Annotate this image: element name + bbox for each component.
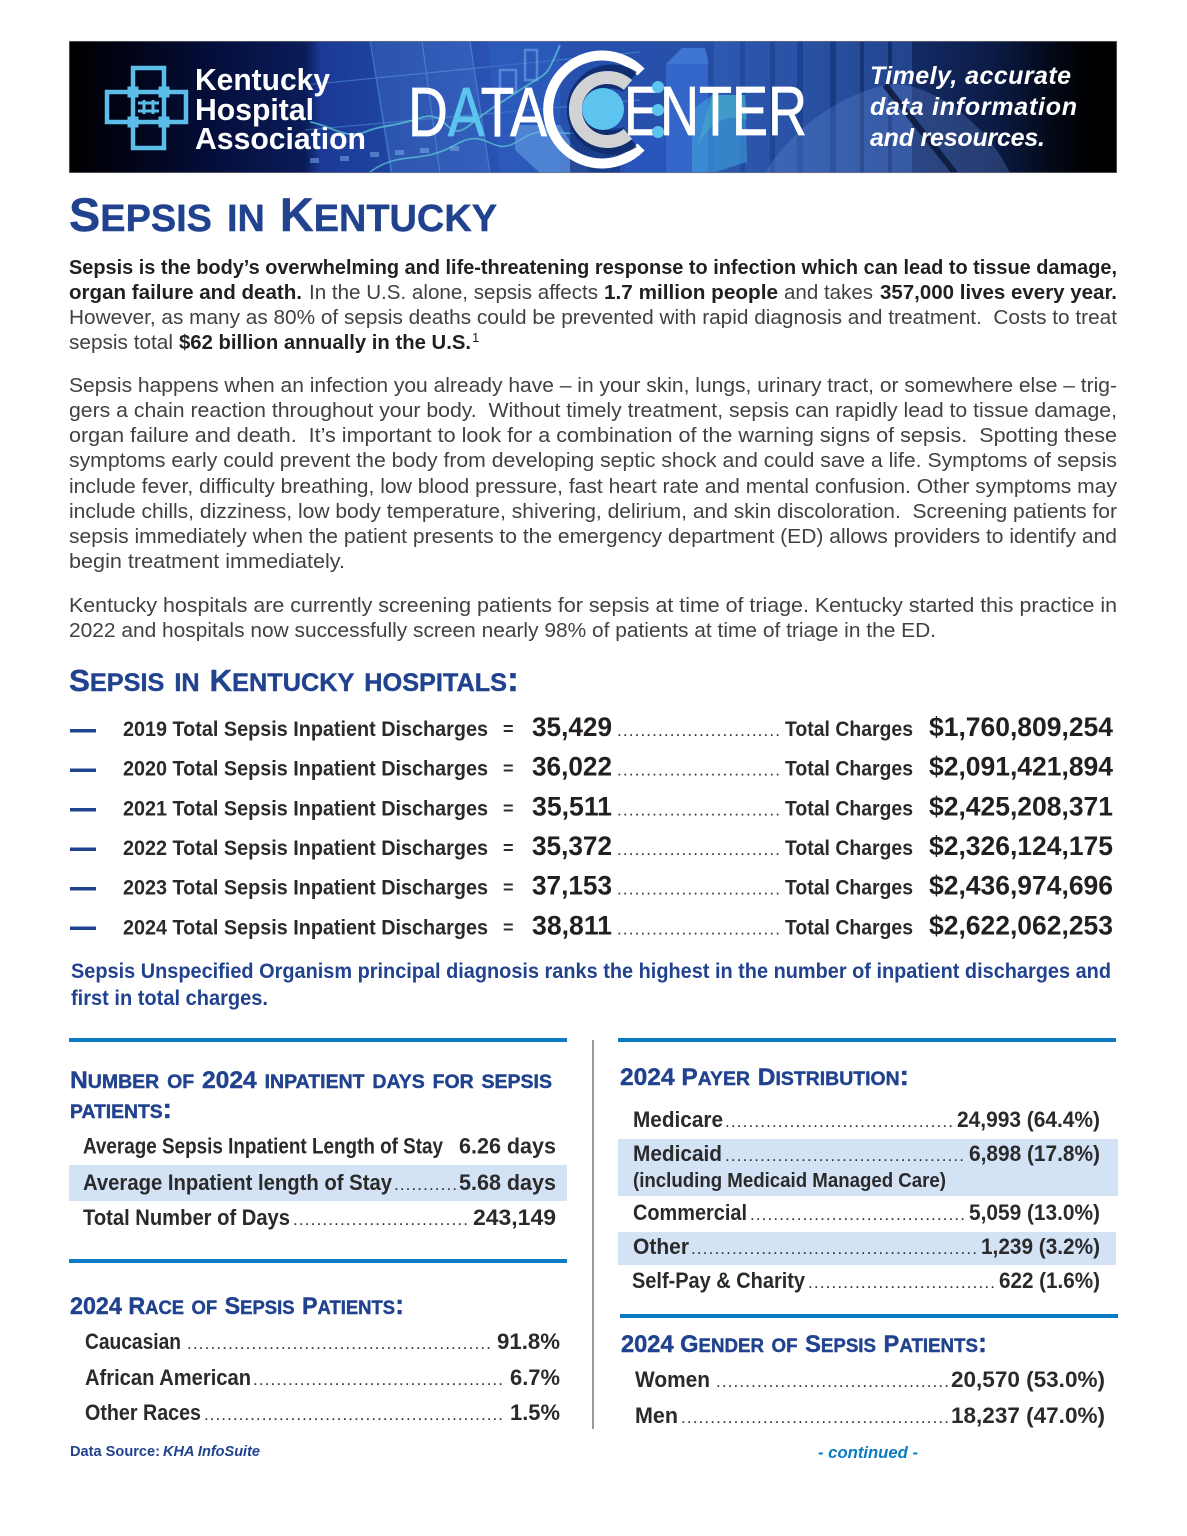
row: commercial: 5,059 (13.0%): [969, 1200, 1100, 1225]
row: caucasian: ....................................................: [187, 1334, 491, 1353]
row 2020: 36,022: [532, 752, 612, 782]
row: women: 20,570 (53.0%): [951, 1367, 1105, 1392]
row 2023: [70, 871, 1113, 901]
row: commercial: Commercial: [633, 1200, 747, 1225]
panel: payer distribution: [618, 1038, 1118, 1293]
row: average inpatient length of stay: Average Inpatient length of Stay: [83, 1170, 392, 1195]
row: average sepsis length of stay: Average Sepsis Inpatient Length of Stay: [83, 1134, 443, 1158]
row 2022: 2022 Total Sepsis Inpatient Discharges: [123, 836, 488, 860]
row 2024: 38,811: [532, 910, 612, 940]
symptoms paragraph: Sepsis happens when an infection you already have – in your skin, lungs, urinary tract, or somewhere else – trig-: [69, 374, 1117, 397]
row: medicaid: .........................................: [725, 1146, 964, 1165]
row 2020: Total Charges: [785, 757, 913, 781]
intro paragraph: However, as many as 80% of sepsis deaths could be prevented with rapid diagnosis and treatment. Costs to treat: [69, 306, 1117, 329]
row 2020: ............................: [617, 761, 780, 780]
row: medicaid: 6,898 (17.8%): [969, 1141, 1100, 1166]
intro paragraph: 1.7 million people: [604, 281, 778, 304]
logo: association name: Hospital: [195, 92, 314, 127]
row 2020: =: [503, 759, 514, 779]
row 2019: =: [503, 719, 514, 739]
row 2023: Total Charges: [785, 876, 913, 900]
row: total number of days: 243,149: [473, 1205, 556, 1230]
data center wordmark: DATA: [408, 73, 547, 151]
tagline: Timely, accurate: [870, 62, 1071, 90]
row: total number of days: [83, 1205, 556, 1230]
tagline: and resources.: [870, 124, 1045, 152]
continued note: - continued -: [818, 1443, 918, 1462]
row: total number of days: Total Number of Days: [83, 1205, 290, 1230]
heading: inpatient days: Number of 2024 inpatient days for sepsis: [70, 1063, 552, 1094]
row: average inpatient length of stay: [69, 1165, 567, 1201]
logo: cross icon: [107, 68, 186, 148]
symptoms paragraph: include fever, difficulty breathing, low blood pressure, fast heart rate and mental confusion. Other symptoms may: [69, 475, 1118, 498]
row: men: ..............................................: [681, 1408, 949, 1427]
row: self-pay and charity: Self-Pay & Charity: [632, 1268, 805, 1293]
data source note: KHA InfoSuite: [163, 1443, 260, 1460]
banner background artwork: [69, 41, 1117, 173]
symptoms paragraph: begin treatment immediately.: [69, 550, 345, 573]
row: african american: [85, 1365, 560, 1390]
row 2024: Total Charges: [785, 915, 913, 939]
intro paragraph: [69, 256, 1117, 354]
row: men: Men: [635, 1403, 678, 1428]
symptoms paragraph: sepsis immediately when the patient presents to the emergency department (ED) allows providers to identify and: [69, 525, 1117, 548]
row 2019: [70, 712, 1113, 742]
row 2021: Total Charges: [785, 796, 913, 820]
screening paragraph: Kentucky hospitals are currently screening patients for sepsis at time of triage. Kentucky started this practice in: [69, 594, 1117, 617]
row 2022: ............................: [617, 840, 780, 859]
table: yearly discharges and charges: [70, 712, 1113, 940]
row: medicaid: [618, 1139, 1118, 1196]
section heading: hospitals: Sepsis in Kentucky hospitals:: [69, 659, 519, 699]
screening paragraph: [69, 594, 1117, 642]
row: medicaid: Medicaid: [633, 1141, 722, 1166]
panel: gender: [620, 1314, 1118, 1428]
callout: principal diagnosis: Sepsis Unspecified Organism principal diagnosis ranks the highest in the number of inpatient discharges and: [71, 959, 1111, 983]
symptoms paragraph: include chills, dizziness, low body temperature, shivering, delirium, and skin discoloration. Screening patients for: [69, 500, 1117, 523]
row: total number of days: ..............................: [293, 1210, 468, 1229]
row: medicare: [633, 1107, 1100, 1132]
row: average inpatient length of stay: 5.68 days: [459, 1170, 556, 1195]
row 2020: [70, 752, 1113, 782]
row: other races: Other Races: [85, 1400, 201, 1425]
row 2021: ............................: [617, 800, 780, 819]
row: medicare: 24,993 (64.4%): [957, 1107, 1100, 1132]
row: men: [635, 1403, 1105, 1428]
row: self-pay and charity: 622 (1.6%): [999, 1268, 1100, 1293]
row: other: [618, 1232, 1116, 1265]
row 2024: $2,622,062,253: [929, 910, 1113, 940]
header banner: [69, 41, 1117, 173]
row 2022: $2,326,124,175: [929, 831, 1113, 861]
row: women: ........................................: [716, 1372, 949, 1391]
row: african american: African American: [85, 1365, 251, 1390]
row 2024: ............................: [617, 919, 780, 938]
row 2021: 35,511: [532, 791, 612, 821]
row 2024: [70, 910, 1113, 940]
tagline: data information: [870, 93, 1077, 121]
row 2024: =: [503, 917, 514, 937]
row 2020: $2,091,421,894: [929, 752, 1113, 782]
row: caucasian: [85, 1329, 560, 1354]
row: other: 1,239 (3.2%): [981, 1234, 1100, 1259]
intro paragraph: sepsis total: [69, 331, 173, 354]
row: medicare: .......................................: [725, 1112, 953, 1131]
intro paragraph: In the U.S. alone, sepsis affects: [309, 281, 598, 304]
intro paragraph: organ failure and death.: [69, 281, 302, 304]
intro paragraph: 357,000 lives every year.: [880, 281, 1117, 304]
row 2022: =: [503, 838, 514, 858]
tagline: [870, 62, 1077, 152]
row: other races: ....................................................: [204, 1405, 503, 1424]
row: other races: [85, 1400, 560, 1425]
row: average inpatient length of stay: ...........: [394, 1175, 457, 1194]
symptoms paragraph: organ failure and death. It’s important to look for a combination of the warning signs of sepsis. Spotting these: [69, 424, 1117, 447]
screening paragraph: 2022 and hospitals now successfully screen nearly 98% of patients at time of triage in the ED.: [69, 619, 936, 642]
logo: association name: Association: [195, 121, 366, 156]
logo: association name: [195, 62, 366, 156]
row: medicaid: (including Medicaid Managed Care): [633, 1170, 946, 1192]
row 2024: 2024 Total Sepsis Inpatient Discharges: [123, 915, 488, 939]
heading: inpatient days: patients:: [70, 1093, 172, 1124]
data center wordmark: [408, 56, 807, 164]
row 2021: [70, 791, 1113, 821]
row: men: 18,237 (47.0%): [951, 1403, 1105, 1428]
intro paragraph: $62 billion annually in the U.S.: [179, 331, 471, 354]
row: caucasian: 91.8%: [497, 1329, 560, 1354]
intro paragraph: 1: [472, 330, 479, 345]
row: other: Other: [633, 1234, 689, 1259]
row 2022: Total Charges: [785, 836, 913, 860]
row: women: [635, 1367, 1105, 1392]
row: average sepsis length of stay: 6.26 days: [459, 1134, 556, 1158]
row 2022: [70, 831, 1113, 861]
column divider: [592, 1040, 594, 1429]
panel: inpatient days: [69, 1038, 567, 1230]
row: commercial: [633, 1200, 1100, 1225]
symptoms paragraph: symptoms early could prevent the body from developing septic shock and could save a life. Symptoms of sepsis: [69, 449, 1117, 472]
row: self-pay and charity: ................................: [808, 1273, 995, 1292]
symptoms paragraph: [69, 374, 1118, 573]
title: Sepsis in Kentucky: [69, 183, 497, 243]
row 2019: $1,760,809,254: [929, 712, 1113, 742]
heading: race: 2024 Race of Sepsis Patients:: [70, 1289, 404, 1320]
row 2023: =: [503, 878, 514, 898]
data source note: [70, 1443, 260, 1460]
callout: principal diagnosis: [71, 959, 1111, 1010]
heading: payer distribution: 2024 Payer Distribution:: [620, 1060, 909, 1091]
row 2019: ............................: [617, 721, 780, 740]
row 2023: ............................: [617, 880, 780, 899]
data source note: Data Source:: [70, 1443, 160, 1460]
row 2019: 2019 Total Sepsis Inpatient Discharges: [123, 717, 488, 741]
row: medicare: Medicare: [633, 1107, 723, 1132]
symptoms paragraph: gers a chain reaction throughout your body. Without timely treatment, sepsis can rapidly lead to tissue damage,: [69, 399, 1117, 422]
row: caucasian: Caucasian: [85, 1329, 181, 1354]
row: women: Women: [635, 1367, 710, 1392]
intro paragraph: and takes: [784, 281, 873, 304]
heading: inpatient days: [70, 1063, 552, 1124]
row 2020: 2020 Total Sepsis Inpatient Discharges: [123, 757, 488, 781]
heading: gender: 2024 Gender of Sepsis Patients:: [621, 1327, 987, 1358]
row 2021: $2,425,208,371: [929, 791, 1113, 821]
row 2019: Total Charges: [785, 717, 913, 741]
callout: principal diagnosis: first in total charges.: [71, 986, 268, 1010]
row: other: .................................................: [691, 1239, 977, 1258]
data center wordmark: ENTER: [624, 72, 807, 150]
row: other races: 1.5%: [510, 1400, 560, 1425]
row 2023: 2023 Total Sepsis Inpatient Discharges: [123, 876, 488, 900]
row: african american: ...........................................: [253, 1370, 503, 1389]
row 2022: 35,372: [532, 831, 612, 861]
row 2021: 2021 Total Sepsis Inpatient Discharges: [123, 796, 488, 820]
row: african american: 6.7%: [510, 1365, 560, 1390]
intro paragraph: Sepsis is the body’s overwhelming and life-threatening response to infection which can lead to tissue damage,: [69, 256, 1117, 279]
row 2023: 37,153: [532, 871, 612, 901]
row 2023: $2,436,974,696: [929, 871, 1113, 901]
logo: association name: Kentucky: [195, 62, 331, 97]
row: self-pay and charity: [632, 1268, 1100, 1293]
row 2019: 35,429: [532, 712, 612, 742]
row 2021: =: [503, 798, 514, 818]
panel: race: [69, 1259, 567, 1425]
row: commercial: .....................................: [750, 1205, 965, 1224]
